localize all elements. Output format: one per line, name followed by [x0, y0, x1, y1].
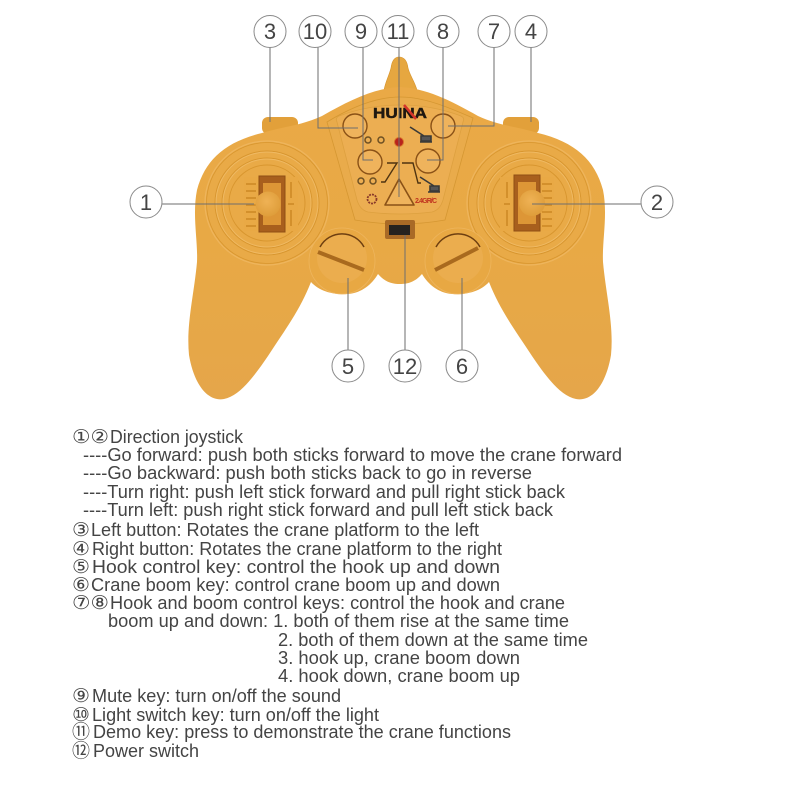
callout 2: 2	[651, 190, 663, 215]
instructions text: Hook control key: control the hook up and down	[92, 557, 500, 577]
callout 3: 3	[264, 19, 276, 44]
instructions text: ----Turn right: push left stick forward and pull right stick back	[83, 482, 566, 502]
callout 6: 6	[456, 354, 468, 379]
callout 7	[478, 16, 510, 48]
instructions text: Right button: Rotates the crane platform to the right	[92, 539, 502, 559]
icon: light	[365, 137, 384, 143]
callout 5	[332, 350, 364, 382]
callout 8: 8	[437, 19, 449, 44]
callout numbers	[130, 16, 673, 382]
centre panel	[327, 97, 473, 224]
instructions text: boom up and down: 1. both of them rise at the same time	[108, 611, 569, 631]
callout 4	[515, 16, 547, 48]
shoulder button left	[262, 117, 298, 134]
controller	[188, 57, 612, 399]
callout 4: 4	[525, 19, 537, 44]
callout 6	[446, 350, 478, 382]
instructions text: ⑤	[72, 556, 90, 578]
shoulder button right	[503, 117, 539, 134]
instructions text: ----Turn left: push right stick forward and pull left stick back	[83, 500, 554, 520]
left wheel	[309, 228, 375, 294]
right wheel	[425, 228, 491, 294]
power switch	[385, 220, 415, 239]
callout 10: 10	[303, 19, 327, 44]
callout 10	[299, 16, 331, 48]
right joystick	[467, 141, 591, 265]
demo led	[394, 138, 404, 146]
instructions text	[72, 426, 622, 762]
buttons and markings	[343, 114, 455, 205]
callout lines	[162, 47, 641, 350]
instructions text: ③	[72, 519, 90, 541]
callout 5: 5	[342, 354, 354, 379]
callout 11	[382, 16, 414, 48]
instructions text: Light switch key: turn on/off the light	[92, 705, 379, 725]
callout 3	[254, 16, 286, 48]
label 2.4G: 2.4GR/C	[415, 198, 437, 205]
antenna	[384, 57, 417, 90]
callout 11: 11	[387, 19, 409, 44]
instructions text: ⑪	[72, 721, 90, 743]
callout 12: 12	[393, 354, 417, 379]
body	[188, 87, 612, 399]
callout 12	[389, 350, 421, 382]
callout 2	[641, 186, 673, 218]
left joystick	[205, 141, 329, 265]
instructions text: 3. hook up, crane boom down	[278, 648, 520, 668]
instructions text: ⑩	[72, 704, 90, 726]
instructions text: Mute key: turn on/off the sound	[92, 686, 341, 706]
instructions text: Direction joystick	[110, 427, 244, 447]
instructions text: Hook and boom control keys: control the hook and crane	[110, 593, 565, 613]
instructions text: ①②	[72, 426, 109, 448]
callout 9: 9	[355, 19, 367, 44]
instructions text: 4. hook down, crane boom up	[278, 666, 520, 686]
instructions text: Power switch	[93, 741, 199, 761]
instructions text: Left button: Rotates the crane platform to the left	[91, 520, 479, 540]
callout 9	[345, 16, 377, 48]
instructions text: ----Go backward: push both sticks back to go in reverse	[83, 463, 532, 483]
logo slash	[404, 105, 416, 119]
icon: star	[368, 194, 376, 204]
logo: HUINA	[373, 105, 427, 122]
instructions text: 2. both of them down at the same time	[278, 630, 588, 650]
instructions text: ④	[72, 538, 90, 560]
instructions text: ----Go forward: push both sticks forward to move the crane forward	[83, 445, 622, 465]
icon: crane top	[410, 127, 432, 142]
instructions text: ⑦⑧	[72, 592, 109, 614]
callout 1	[130, 186, 162, 218]
instructions text: ⑨	[72, 685, 90, 707]
icon: crane bottom	[420, 177, 440, 192]
instructions text: Crane boom key: control crane boom up and down	[91, 575, 500, 595]
instructions text: ⑥	[72, 574, 90, 596]
callout 8	[427, 16, 459, 48]
instructions text: ⑫	[72, 740, 90, 762]
callout 1: 1	[140, 190, 152, 215]
instructions text: Demo key: press to demonstrate the crane functions	[93, 722, 511, 742]
icon: mute	[358, 178, 376, 184]
callout 7: 7	[488, 19, 500, 44]
